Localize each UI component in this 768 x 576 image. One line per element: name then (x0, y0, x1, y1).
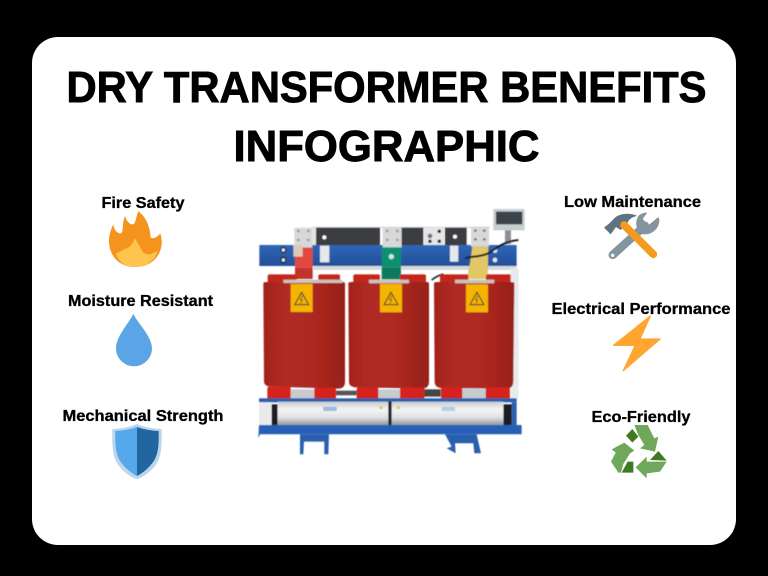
transformer illustration (258, 209, 525, 454)
top yoke (312, 227, 490, 246)
blue beam (259, 245, 517, 270)
base frame (258, 398, 522, 454)
phase busbars (293, 227, 518, 280)
cast resin coils (263, 282, 514, 389)
benefit: electrical performance: Electrical Performance (552, 301, 731, 318)
spacers under coils (291, 389, 486, 399)
benefit: mechanical strength (62, 408, 224, 479)
coil caps (268, 274, 512, 284)
icon: flame (109, 211, 162, 267)
red coil feet (267, 387, 510, 400)
benefit: low maintenance (564, 194, 701, 257)
benefit: fire safety: Fire Safety (102, 195, 185, 212)
benefit: mechanical strength: Mechanical Strength (62, 408, 224, 425)
icon: water drop (116, 314, 152, 366)
icon: shield (112, 424, 162, 479)
display panel (493, 209, 525, 244)
benefit: moisture resistant (68, 293, 213, 366)
title (66, 63, 706, 171)
warning labels (291, 284, 488, 312)
benefit: electrical performance (552, 301, 731, 371)
benefit: moisture resistant: Moisture Resistant (68, 293, 213, 310)
benefit: eco-friendly: Eco-Friendly (592, 409, 691, 426)
benefit: fire safety (102, 195, 185, 267)
title: DRY TRANSFORMER BENEFITS (66, 63, 706, 112)
title: INFOGRAPHIC (234, 122, 540, 171)
icon: lightning bolt (614, 316, 660, 371)
icon: hammer and wrench (604, 213, 659, 257)
icon: recycle arrows (611, 425, 667, 478)
top coil highlights (283, 280, 494, 283)
side post (511, 268, 519, 398)
benefit: eco-friendly (592, 409, 691, 478)
benefit: low maintenance: Low Maintenance (564, 194, 701, 211)
